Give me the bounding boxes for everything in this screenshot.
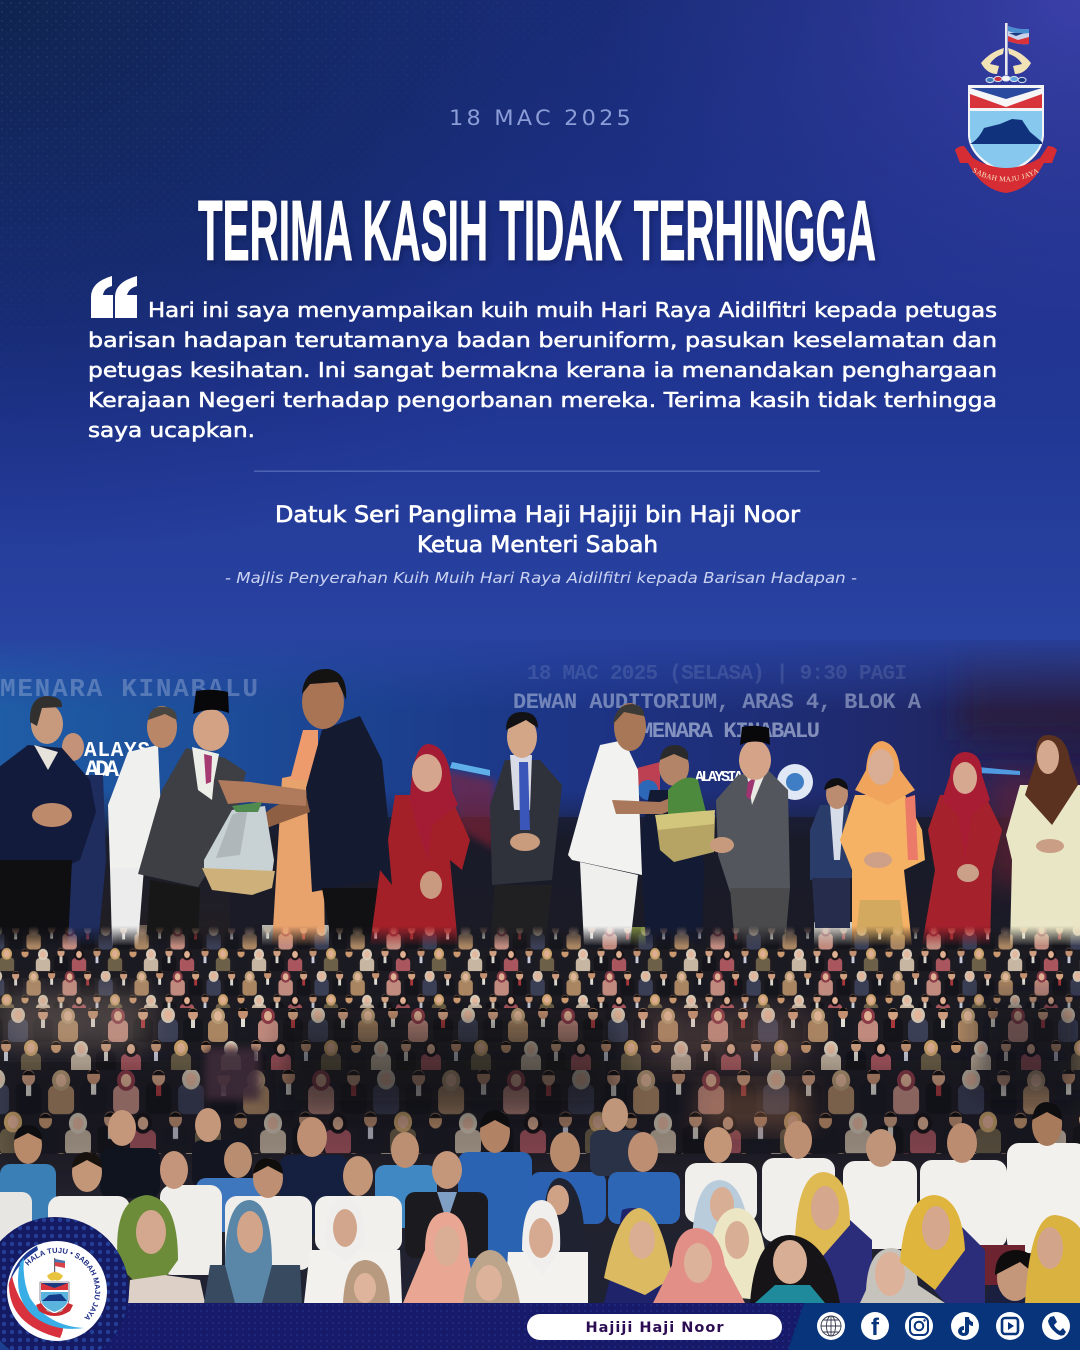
badge circular text: HALA TUJU • SABAH MAJU JAYA <box>24 1248 100 1320</box>
white hijab officer left <box>304 1250 402 1303</box>
screen lettering: ALAYS <box>84 740 150 763</box>
icon: phone <box>1042 1312 1070 1340</box>
quote lines: Kerajaan Negeri terhadap pengorbanan mereka. Terima kasih tidak terhingga <box>88 388 997 412</box>
state crest logo top right: SABAH MAJU JAYA <box>972 168 1039 182</box>
name pill <box>527 1314 782 1340</box>
lower rows <box>0 1070 1080 1154</box>
young man <box>985 1285 1048 1303</box>
icon: instagram <box>905 1312 933 1340</box>
yellow hijab 1 <box>604 1208 675 1303</box>
name pill: Hajiji Haji Noor <box>586 1320 724 1336</box>
row: uniformed officers <box>0 1098 680 1274</box>
tan hijab small <box>343 1260 390 1303</box>
blue scarf woman <box>204 1265 302 1303</box>
person: woman behind left <box>62 733 106 945</box>
speaker role: Ketua Menteri Sabah <box>417 532 658 558</box>
quote lines: Hari ini saya menyampaikan kuih muih Hari Raya Aidilfitri kepada petugas <box>148 298 997 322</box>
icon: globe <box>817 1312 845 1340</box>
tan hijab <box>463 1250 520 1303</box>
screen lettering: DEWAN AUDITORIUM, ARAS 4, BLOK A <box>513 690 922 715</box>
person: woman in orange behind <box>272 730 325 945</box>
campaign badge bottom left <box>0 1217 129 1350</box>
person: chief minister receiving <box>710 726 790 945</box>
screen lettering: ALAYSIA <box>695 769 743 786</box>
stage screen backdrop <box>0 630 1080 955</box>
icon: video play <box>996 1312 1024 1340</box>
quote lines <box>88 298 997 442</box>
state crest logo top right <box>955 23 1057 193</box>
mountain <box>970 119 1042 144</box>
green hijab woman <box>117 1195 178 1285</box>
screen lettering: MENARA KINABALU <box>640 719 820 744</box>
ribbon banner <box>955 146 1057 193</box>
social icons <box>817 1312 1070 1341</box>
tone zones <box>0 990 1080 1170</box>
white hijab officer centre <box>505 1252 588 1303</box>
crowd base tone <box>0 1154 1031 1303</box>
icon: opening quote mark <box>91 276 137 318</box>
person: second woman in red <box>922 752 1002 945</box>
gift basket wrapped in plastic <box>202 802 275 895</box>
pink hijab 2 <box>653 1228 745 1303</box>
icon: tiktok <box>951 1312 979 1340</box>
person: man in navy jacket <box>0 696 96 945</box>
hands holding pole <box>981 48 1031 74</box>
screen lettering <box>0 663 922 786</box>
icon: facebook: f <box>871 1314 880 1341</box>
person: white uniform officer <box>108 706 177 945</box>
person: man with blue tie <box>490 712 562 885</box>
gift basket in gold wrap <box>655 778 715 862</box>
stage floor screens <box>138 922 852 945</box>
quote lines: barisan hadapan terutamanya badan beruniform, pasukan keselamatan dan <box>88 328 997 352</box>
person: chief minister in grey jacket <box>138 690 246 945</box>
person: young man in blue suit <box>810 778 852 928</box>
dark hijab woman <box>546 1178 584 1224</box>
person: man in navy shirt presenting <box>218 669 394 945</box>
screen lettering: ADA <box>85 757 119 783</box>
person: woman in cream with brown hijab <box>1006 735 1080 945</box>
person: naval officer in white <box>568 703 668 945</box>
screen emblem <box>637 762 813 800</box>
photo: stage with dignitaries <box>0 630 1080 955</box>
event caption: - Majlis Penyerahan Kuih Muih Hari Raya Aidilfitri kepada Barisan Hadapan - <box>225 569 857 587</box>
grey hijab <box>860 1248 945 1303</box>
back rows <box>0 928 1080 1008</box>
quote lines: saya ucapkan. <box>88 418 255 442</box>
photo: audience crowd <box>0 925 1080 1305</box>
cream hijab <box>710 1208 765 1300</box>
person: man in dark shirt behind basket <box>640 745 704 945</box>
middle rows <box>0 1008 1080 1074</box>
quote text block <box>88 276 997 442</box>
beads <box>986 76 1026 83</box>
pale blue hijab <box>692 1180 768 1265</box>
flag pole and flag <box>1005 23 1029 75</box>
speaker name: Datuk Seri Panglima Haji Hajiji bin Haji Noor <box>275 502 801 528</box>
row: front women <box>117 1172 1080 1303</box>
date: 18 MAC 2025 <box>449 106 634 130</box>
yellow hijab right <box>1025 1215 1080 1303</box>
footer bar <box>60 1303 1080 1350</box>
person: woman in red hijab <box>370 744 470 945</box>
badge swoosh <box>8 1246 38 1288</box>
icon: facebook <box>861 1312 889 1341</box>
shield <box>968 85 1044 175</box>
pink hijab <box>403 1212 478 1303</box>
screen lettering: MENARA KINABALU <box>0 674 258 704</box>
screen lettering: 18 MAC 2025 (SELASA) | 9:30 PAGI <box>527 663 907 686</box>
woman with glasses <box>750 1235 840 1303</box>
badge crest <box>36 1258 73 1316</box>
person: woman in orange baju <box>840 741 925 945</box>
quote lines: petugas kesihatan. Ini sangat bermakna kerana ia menandakan penghargaan <box>88 358 997 382</box>
row: white uniforms <box>0 1102 1080 1285</box>
yellow hijab with navy dress <box>790 1220 872 1303</box>
yellow hijab 3 navy dress <box>900 1225 985 1303</box>
